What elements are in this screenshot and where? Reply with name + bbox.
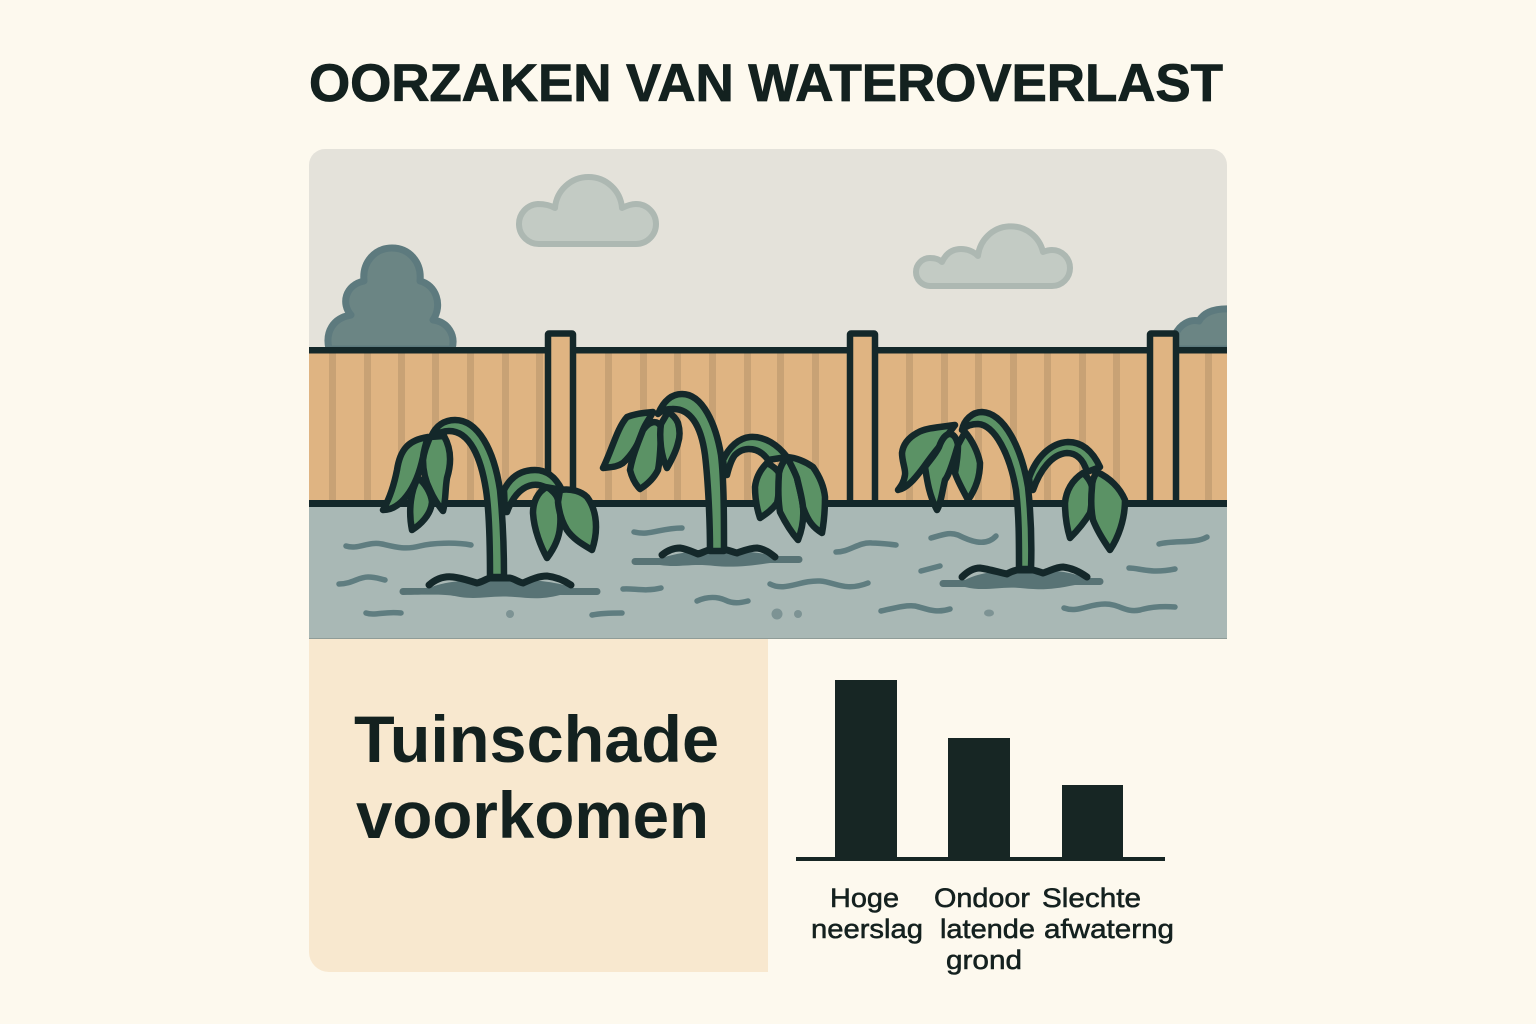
fence — [309, 334, 1227, 506]
heading: tuinschade voorkomen: voorkomen — [356, 778, 709, 852]
heading: tuinschade voorkomen: Tuinschade — [354, 702, 719, 776]
bar: ondoorlatende grond — [948, 738, 1010, 859]
bush left — [328, 248, 453, 349]
bar chart — [796, 680, 1174, 975]
flood water — [309, 500, 1227, 639]
chart baseline — [796, 857, 1165, 861]
title: OORZAKEN VAN WATEROVERLAST — [309, 54, 1223, 113]
plant 1 — [383, 420, 601, 598]
label: hoge neerslag: Hoge — [830, 883, 899, 913]
panel: garden illustration — [309, 149, 1232, 639]
bush right — [1175, 309, 1232, 349]
label: hoge neerslag — [811, 883, 923, 944]
heading: tuinschade voorkomen — [354, 702, 719, 852]
cloud right — [916, 226, 1070, 286]
label: slechte afwaterng — [1042, 883, 1174, 944]
label: ondoor latende grond — [934, 883, 1035, 975]
plant 2 — [603, 394, 825, 567]
plant 3 — [898, 412, 1125, 589]
panel: tuinschade voorkomen — [309, 639, 768, 972]
label: ondoor latende grond: latende — [940, 914, 1035, 944]
label: ondoor latende grond: grond — [946, 945, 1022, 975]
cloud left — [519, 177, 656, 244]
bar: hoge neerslag — [835, 680, 897, 859]
label: slechte afwaterng: Slechte — [1042, 883, 1141, 913]
label: hoge neerslag: neerslag — [811, 914, 923, 944]
label: slechte afwaterng: afwaterng — [1044, 914, 1174, 944]
label: ondoor latende grond: Ondoor — [934, 883, 1030, 913]
bar: slechte afwatering — [1062, 785, 1123, 859]
